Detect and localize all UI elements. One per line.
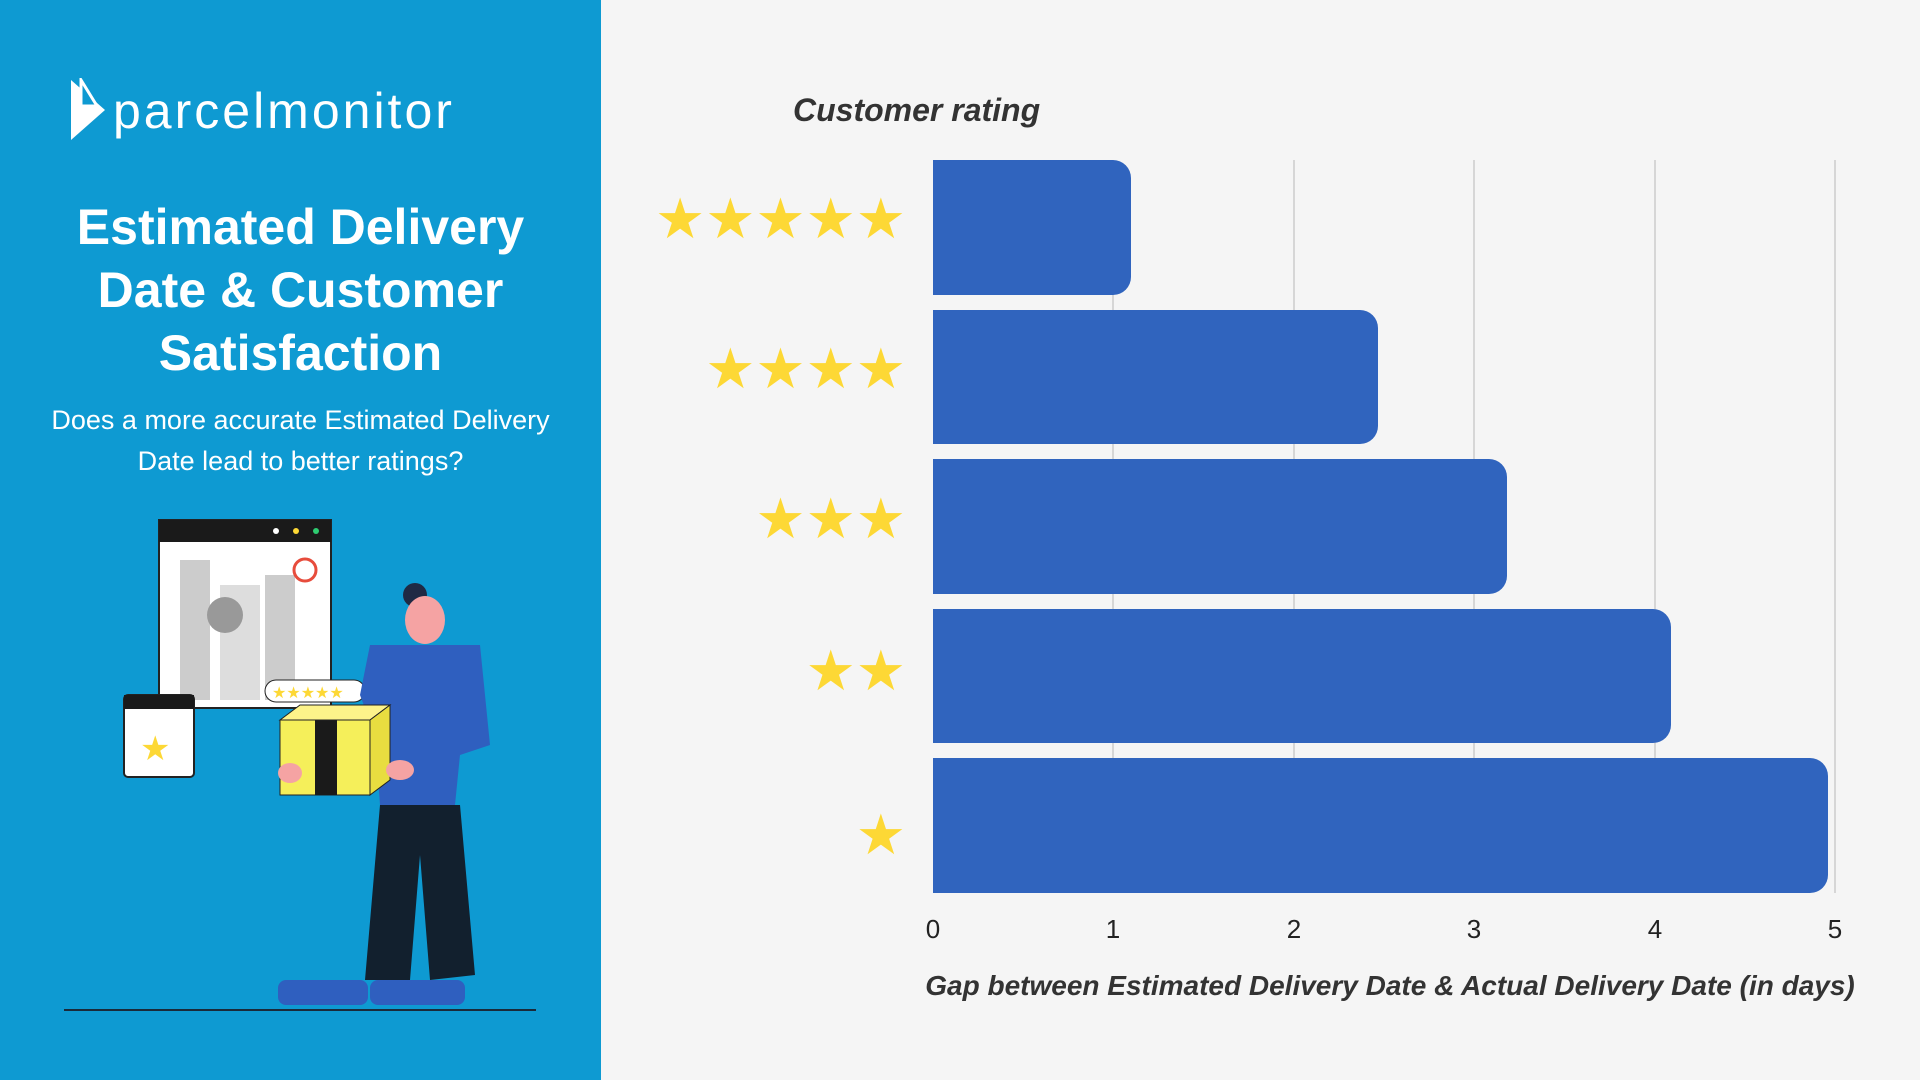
bar chart: 3 [1467, 914, 1481, 944]
illustration: delivery person [64, 519, 536, 1011]
subtitle [51, 405, 550, 476]
title: Estimated Delivery [77, 199, 524, 255]
title: Satisfaction [159, 325, 442, 381]
title: Date & Customer [98, 262, 503, 318]
bar chart: ★ [856, 803, 906, 868]
title [77, 199, 524, 381]
bar chart: 4 [1648, 914, 1662, 944]
bar chart: 0 [926, 914, 940, 944]
bar chart: 1 [1106, 914, 1120, 944]
illustration: delivery person: ★ [140, 730, 170, 768]
x axis title: Gap between Estimated Delivery Date & Actual Delivery Date (in days) [925, 970, 1855, 1001]
illustration: delivery person: ★★★★★ [272, 685, 344, 702]
bar chart: ★★ [806, 639, 906, 704]
bar chart: ★★★ [755, 487, 906, 552]
subtitle: Date lead to better ratings? [138, 446, 463, 476]
panel: left [0, 0, 601, 1080]
bar chart: ★★★★★ [655, 187, 906, 252]
logo: parcelmonitor [113, 83, 455, 139]
bar chart [655, 160, 1842, 944]
bar chart: 5 [1828, 914, 1842, 944]
bar chart: ★★★★ [705, 337, 906, 402]
bar chart: 2 [1287, 914, 1301, 944]
chart title: customer rating: Customer rating [793, 92, 1040, 128]
subtitle: Does a more accurate Estimated Delivery [51, 405, 550, 435]
